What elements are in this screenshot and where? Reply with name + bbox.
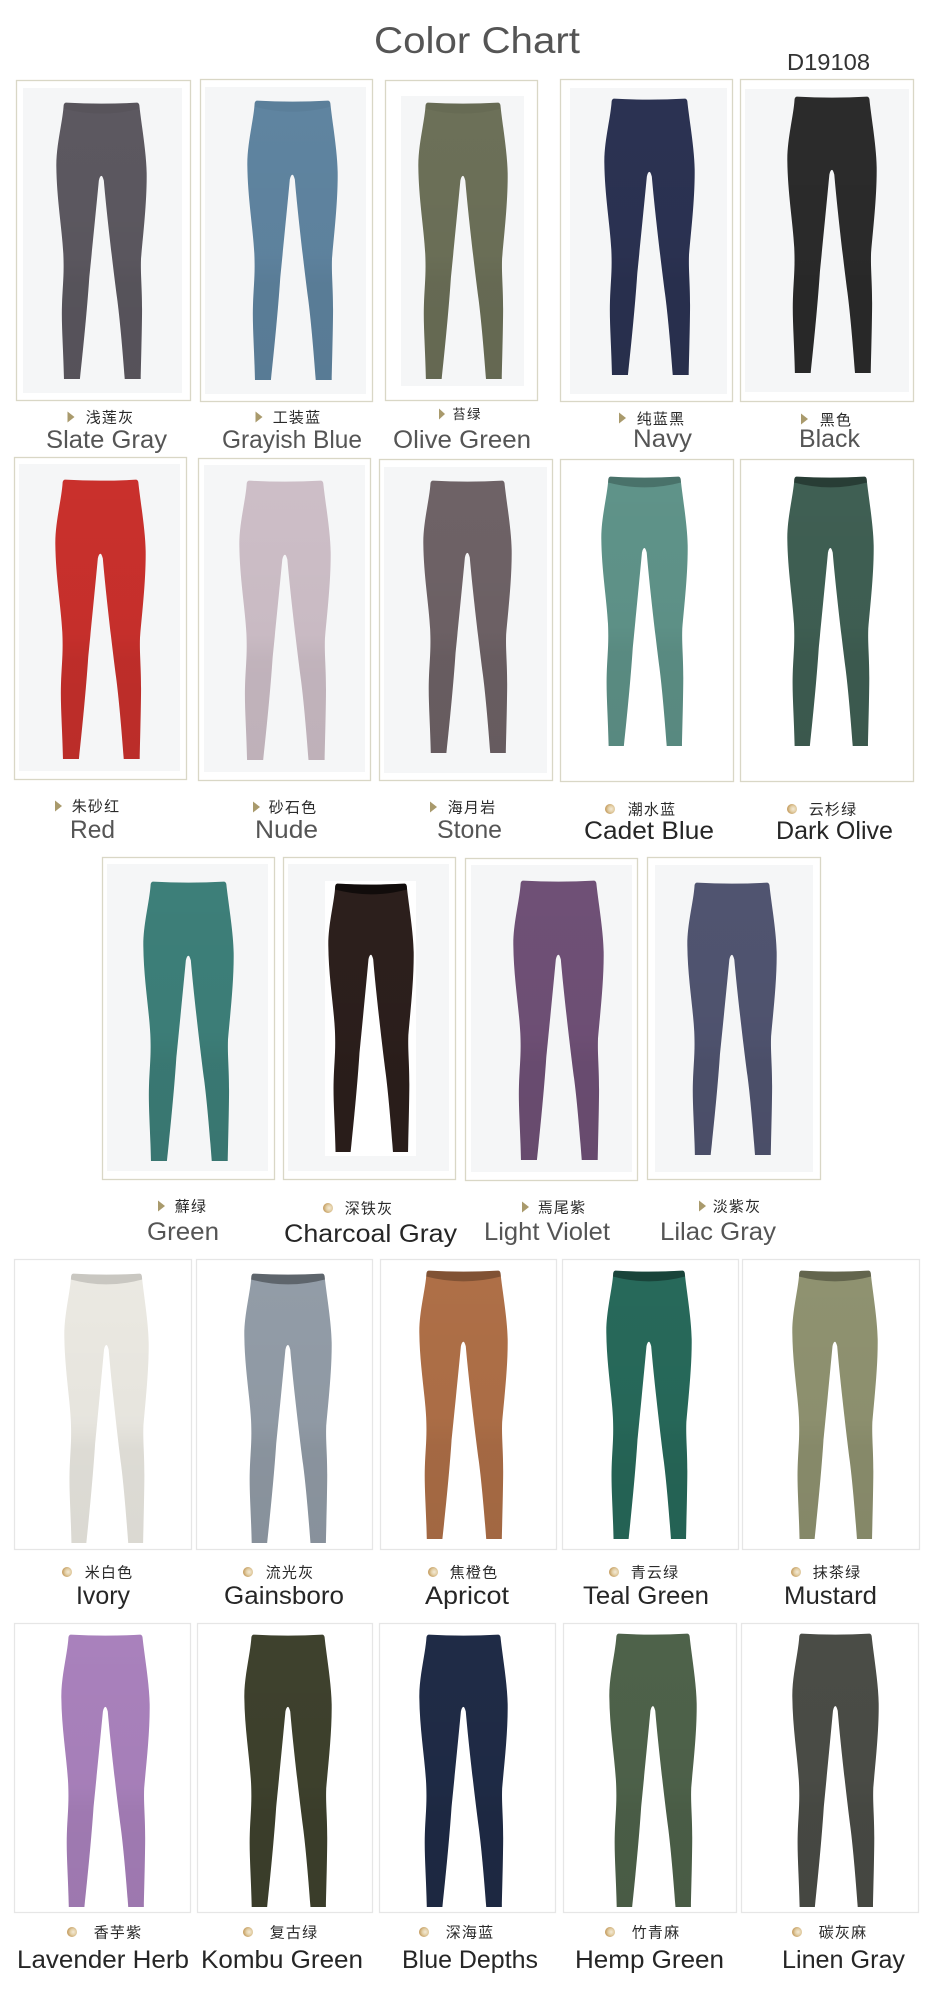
label: 复古绿: 复古绿 (270, 1924, 318, 1942)
icon: triangle (699, 1200, 706, 1212)
icon: dot (605, 804, 615, 814)
card: Light Violet (466, 858, 638, 1246)
card: Red (14, 458, 186, 844)
card: Green (102, 858, 274, 1246)
label: 工装蓝: 工装蓝 (273, 410, 321, 426)
label: Hemp Green: Hemp Green (575, 1946, 724, 1974)
label: 海月岩: 海月岩 (448, 800, 496, 816)
label: 苔绿: 苔绿 (452, 406, 482, 422)
leggings: Red (55, 480, 146, 759)
label: Green: Green (147, 1218, 219, 1246)
leggings: Nude (239, 481, 331, 760)
label: 竹青麻: 竹青麻 (632, 1924, 680, 1942)
label: Charcoal Gray: Charcoal Gray (284, 1220, 458, 1248)
leggings: Green (143, 882, 234, 1161)
card: Nude (198, 458, 370, 844)
card: Kombu Green (198, 1624, 372, 1974)
leggings: Olive Green (418, 103, 508, 379)
label: 淡紫灰: 淡紫灰 (713, 1198, 761, 1216)
leggings: Hemp Green (609, 1634, 697, 1907)
leggings: Ivory (64, 1274, 149, 1543)
icon: dot (791, 1567, 801, 1577)
leggings: Slate Gray (56, 103, 147, 379)
label: 朱砂红: 朱砂红 (72, 798, 120, 816)
leggings: Grayish Blue (247, 101, 338, 380)
leggings: Blue Depths (419, 1635, 508, 1907)
leggings: Kombu Green (244, 1635, 332, 1907)
card: Lavender Herb (14, 1624, 190, 1974)
icon: dot (609, 1567, 619, 1577)
label: Kombu Green: Kombu Green (201, 1946, 363, 1974)
icon: triangle (439, 408, 445, 420)
label: Grayish Blue: Grayish Blue (222, 426, 362, 454)
icon: triangle (522, 1202, 529, 1212)
icon: triangle (55, 800, 62, 812)
icon: dot (428, 1567, 438, 1577)
card: Mustard (742, 1260, 920, 1610)
icon: triangle (619, 412, 626, 424)
icon: dot (323, 1203, 333, 1213)
card: Black (740, 80, 914, 453)
leggings: Charcoal Gray (328, 884, 414, 1152)
label: 焉尾紫: 焉尾紫 (538, 1200, 586, 1216)
card: Apricot (380, 1260, 556, 1610)
label: Apricot: Apricot (425, 1582, 509, 1610)
icon: dot (243, 1927, 253, 1937)
icon: dot (243, 1567, 253, 1577)
leggings: Mustard (792, 1271, 878, 1539)
icon: dot (605, 1927, 615, 1937)
leggings: Stone (423, 481, 512, 753)
label: Gainsboro: Gainsboro (224, 1582, 344, 1610)
label: Teal Green: Teal Green (583, 1582, 709, 1610)
card: Navy (560, 80, 732, 453)
leggings: Light Violet (513, 881, 604, 1160)
label: Dark Olive: Dark Olive (776, 817, 893, 845)
label: 米白色: 米白色 (85, 1564, 133, 1582)
icon: dot (787, 804, 797, 814)
label: Stone: Stone (437, 816, 502, 844)
card: Stone (380, 460, 552, 844)
leggings: Linen Gray (792, 1634, 879, 1907)
label: 抹茶绿: 抹茶绿 (813, 1564, 861, 1582)
label: 深海蓝: 深海蓝 (446, 1924, 494, 1942)
icon: dot (62, 1567, 72, 1577)
label: 流光灰: 流光灰 (266, 1564, 314, 1582)
label: Blue Depths: Blue Depths (402, 1946, 538, 1974)
label: 砂石色: 砂石色 (269, 800, 317, 816)
leggings: Black (787, 97, 877, 373)
label: 香芋紫: 香芋紫 (94, 1924, 142, 1942)
leggings: Apricot (419, 1271, 508, 1539)
leggings: Navy (604, 99, 695, 375)
card: Gainsboro (196, 1260, 372, 1610)
card: Dark Olive (740, 460, 914, 845)
style code: D19108 (787, 49, 870, 75)
icon: triangle (253, 802, 260, 812)
label: Lilac Gray: Lilac Gray (660, 1218, 777, 1246)
icon: triangle (801, 414, 808, 424)
icon: dot (419, 1927, 429, 1937)
leggings: Cadet Blue (601, 477, 688, 746)
icon: triangle (158, 1200, 165, 1212)
leggings: Teal Green (606, 1271, 692, 1539)
card: Slate Gray (16, 80, 190, 454)
label: Red: Red (70, 816, 115, 844)
label: Navy: Navy (633, 425, 693, 453)
label: 深铁灰: 深铁灰 (345, 1200, 393, 1218)
label: Ivory: Ivory (76, 1582, 130, 1610)
card: Teal Green (562, 1260, 738, 1610)
card: Lilac Gray (648, 858, 820, 1246)
card: Blue Depths (380, 1624, 556, 1974)
icon: triangle (256, 412, 262, 422)
icon: triangle (68, 412, 74, 422)
label: Lavender Herb: Lavender Herb (17, 1946, 189, 1974)
label: 碳灰麻: 碳灰麻 (819, 1924, 867, 1942)
card: Linen Gray (742, 1624, 918, 1974)
card: Cadet Blue (560, 460, 734, 845)
label: Cadet Blue: Cadet Blue (584, 817, 714, 845)
icon: dot (792, 1927, 802, 1937)
leggings: Gainsboro (244, 1274, 332, 1543)
label: Linen Gray: Linen Gray (782, 1946, 905, 1974)
label: 云杉绿: 云杉绿 (809, 802, 857, 818)
card: Ivory (14, 1260, 192, 1610)
label: 青云绿: 青云绿 (631, 1564, 679, 1582)
card: Charcoal Gray (284, 858, 458, 1248)
label: 蘚绿: 蘚绿 (175, 1198, 207, 1216)
label: Slate Gray: Slate Gray (46, 426, 168, 454)
label: 纯蓝黑: 纯蓝黑 (637, 411, 685, 428)
label: Olive Green: Olive Green (393, 426, 531, 454)
leggings: Lavender Herb (61, 1635, 150, 1907)
card: Olive Green (386, 80, 538, 454)
icon: triangle (430, 802, 437, 812)
label: Light Violet: Light Violet (484, 1218, 610, 1246)
title: Color Chart (374, 20, 581, 61)
label: 黑色: 黑色 (820, 412, 852, 429)
icon: dot (67, 1927, 77, 1937)
label: Nude: Nude (255, 816, 318, 844)
leggings: Dark Olive (787, 477, 874, 746)
label: Mustard: Mustard (784, 1582, 877, 1610)
label: 潮水蓝: 潮水蓝 (628, 802, 676, 818)
label: 焦橙色: 焦橙色 (450, 1564, 498, 1582)
label: 浅莲灰: 浅莲灰 (86, 410, 134, 426)
leggings: Lilac Gray (687, 883, 777, 1155)
card: Hemp Green (564, 1624, 736, 1974)
label: Black: Black (799, 425, 860, 453)
card: Grayish Blue (200, 80, 372, 454)
